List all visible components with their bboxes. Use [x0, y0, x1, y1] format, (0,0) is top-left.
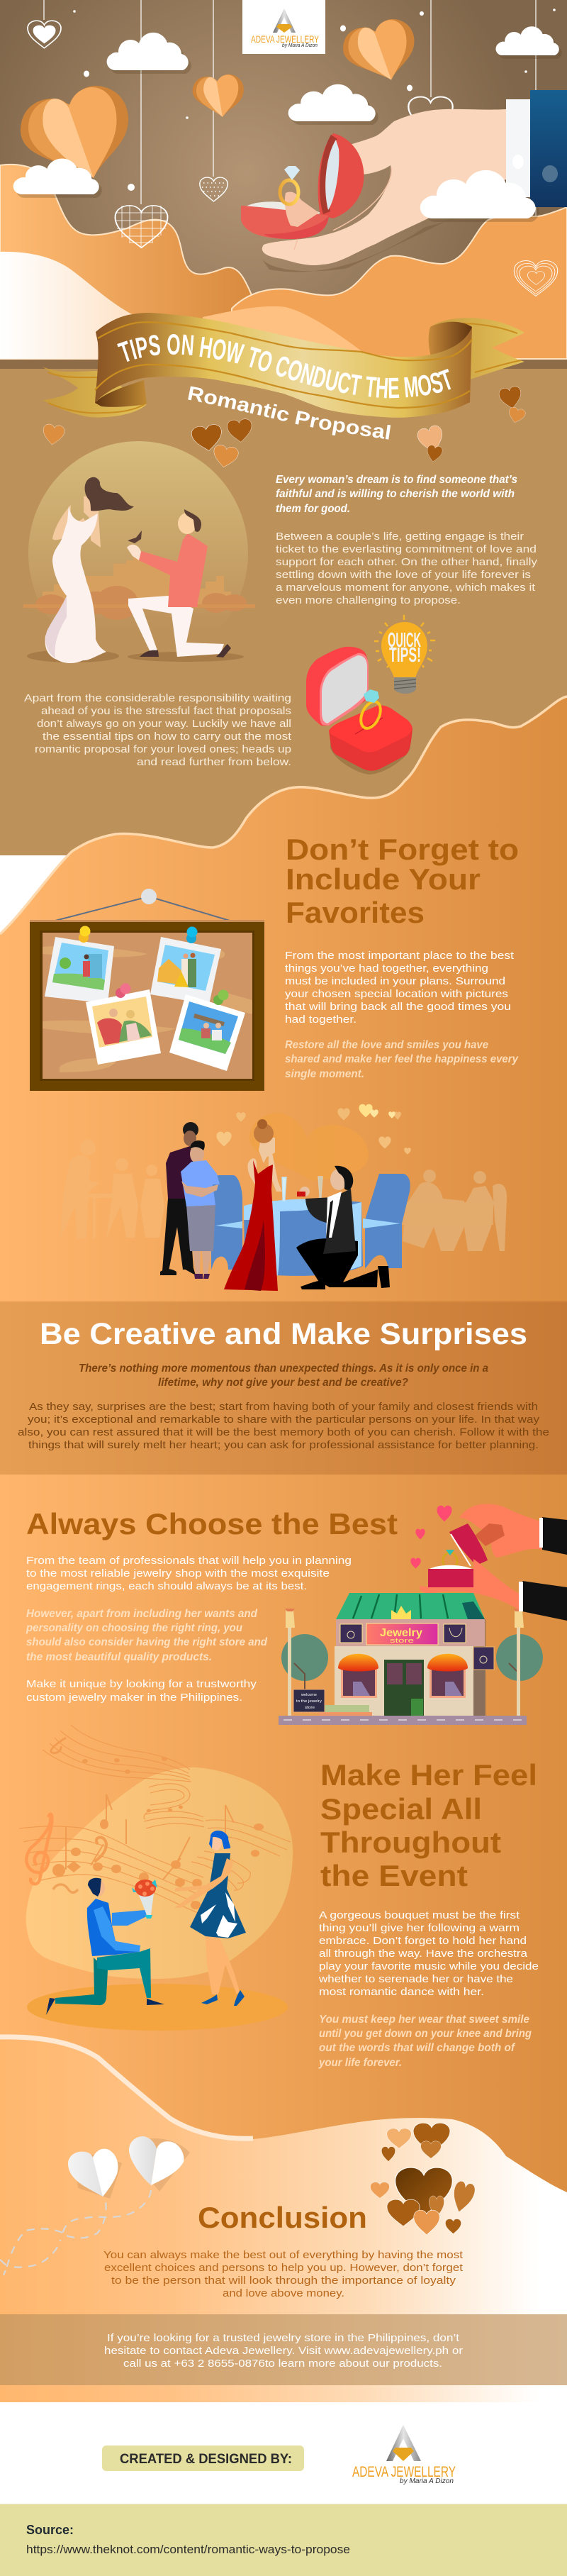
- body: From the most important place to the best: [285, 950, 515, 962]
- sandwich board: [293, 1689, 325, 1712]
- conclusion wave highlight: [0, 2037, 253, 2138]
- jewelry store: [279, 1593, 543, 1725]
- body: [103, 2249, 464, 2299]
- trees: [35, 586, 247, 620]
- woman: [45, 477, 134, 663]
- body: You can always make the best out of everything by having the most: [103, 2249, 464, 2261]
- photo 2: [150, 937, 221, 1004]
- heading: Favorites: [286, 896, 425, 929]
- body: [285, 950, 515, 1026]
- staff right: [191, 1820, 291, 1890]
- notes: [52, 1757, 264, 1909]
- hanger: [55, 896, 230, 921]
- body: most romantic dance with her.: [319, 1986, 484, 1998]
- diamond: [284, 166, 300, 180]
- contact text: [104, 2332, 463, 2370]
- body: From the team of professionals that will help you in planning: [26, 1555, 352, 1567]
- arch: [28, 441, 248, 665]
- body: you; it’s exceptional and remarkable to share with the particular persons on your life. In that way: [28, 1414, 540, 1426]
- body: and love above money.: [223, 2287, 344, 2299]
- gold ring: [357, 699, 384, 731]
- logo top: [242, 0, 325, 54]
- jewelry store: store: [390, 1637, 414, 1644]
- line heart: top left: [28, 21, 61, 48]
- body: must be included in your plans. Surround: [285, 975, 505, 987]
- windows: [341, 1665, 466, 1698]
- lead: [79, 1362, 488, 1389]
- silhouettes left: [60, 1140, 164, 1238]
- glasses: [282, 1177, 286, 1201]
- intro lead: Every woman’s dream is to find someone that’s: [276, 474, 517, 486]
- heading: Special All: [320, 1792, 482, 1826]
- body: also, you can rest assured that it will be the best memory both of you can cherish. Follow it with the: [18, 1426, 549, 1438]
- highlight: your life forever.: [318, 2057, 402, 2069]
- intro paragraph: a marvelous moment for anyone, which makes it: [276, 582, 536, 594]
- steps: [320, 1705, 369, 1712]
- highlight: [285, 1039, 519, 1080]
- contact text: If you’re looking for a trusted jewelry store in the Philippines, don’t: [107, 2332, 460, 2344]
- intro right aligned paragraph: don’t always go on your way. Luckily we have all: [37, 718, 291, 730]
- kneeling man: [46, 1878, 164, 2015]
- couple with bouquet: [46, 1831, 246, 2015]
- staff top: [43, 1725, 191, 1782]
- hands with ring box: [410, 1504, 567, 1621]
- table: [244, 1200, 363, 1276]
- music notes: [19, 1725, 291, 1914]
- cork board: [30, 889, 264, 1091]
- thumbnail: [335, 150, 360, 170]
- line heart: dotted: [200, 177, 228, 201]
- body: As they say, surprises are the best; start from having both of your family and closest friends with: [29, 1401, 538, 1413]
- contact text: call us at +63 2 8655-0876to learn more about our products.: [123, 2358, 442, 2370]
- highlight: out the words that will change both of: [319, 2042, 516, 2054]
- box shadow: [330, 738, 410, 775]
- left orange hill: [0, 165, 262, 359]
- paper heart: big left: [21, 86, 128, 178]
- door: [384, 1660, 424, 1716]
- left tail: [43, 367, 147, 417]
- gem: [364, 689, 379, 703]
- intro right aligned paragraph: and read further from below.: [137, 756, 291, 768]
- body: whether to serenade her or have the: [318, 1973, 513, 1985]
- stars: [10, 9, 556, 198]
- bouquet: [132, 1880, 157, 1919]
- intro paragraph: [276, 531, 538, 606]
- hand: [262, 109, 506, 265]
- main ribbon: [95, 313, 472, 418]
- ring: [280, 180, 298, 204]
- cloud shadows: [16, 30, 562, 222]
- box lid: [318, 133, 364, 218]
- lower sleeve: [522, 1581, 567, 1621]
- intro text: faithful and is willing to cherish the world with: [276, 488, 515, 500]
- photo 4: [169, 994, 245, 1071]
- highlight: Restore all the love and smiles you have: [285, 1039, 488, 1051]
- created by badge: CREATED & DESIGNED BY:: [120, 2452, 292, 2467]
- road: [279, 1716, 527, 1725]
- gold ring: [443, 1553, 457, 1570]
- intro paragraph: ticket to the everlasting commitment of love and: [276, 543, 537, 555]
- section: make her feel special: [318, 1758, 539, 2069]
- roof: [336, 1593, 485, 1619]
- heart left: [68, 2149, 118, 2197]
- jewelry store: Jewelry: [380, 1627, 422, 1639]
- standing woman: [174, 1831, 246, 2006]
- dinner scene: [60, 1104, 507, 1291]
- floor shadows: [27, 650, 244, 662]
- white hill: [0, 252, 142, 359]
- dashed flight path: [0, 2190, 151, 2275]
- hand shadow: [262, 188, 506, 272]
- board: [43, 933, 252, 1079]
- intro right aligned paragraph: Apart from the considerable responsibility waiting: [24, 692, 291, 704]
- kneeling man: [296, 1166, 390, 1289]
- sandwich board: welcome: [301, 1693, 317, 1697]
- small hearts row: [42, 385, 527, 470]
- right fold: [429, 322, 472, 362]
- cuff: [506, 99, 530, 197]
- big faded heart: [249, 1113, 369, 1181]
- source url: https://www.theknot.com/content/romantic-ways-to-propose: [26, 2543, 350, 2556]
- bulb text: QUICK: [388, 629, 421, 652]
- closing: [26, 1678, 257, 1704]
- line heart: outline: [408, 97, 453, 132]
- ground line: [23, 604, 255, 608]
- highlight: the most beautiful quality products.: [26, 1651, 212, 1663]
- photo 3: [86, 989, 161, 1065]
- heading: Be Creative and Make Surprises: [40, 1317, 527, 1351]
- background: sky: [0, 0, 567, 369]
- paper heart: top right: [343, 19, 414, 80]
- highlight: shared and make her feel the happiness every: [285, 1053, 519, 1065]
- logo wordmark: ADEVA JEWELLERY: [251, 33, 319, 45]
- closing: Make it unique by looking for a trustworthy: [26, 1678, 257, 1690]
- body: had together.: [285, 1014, 357, 1026]
- body: all through the way. Have the orchestra: [319, 1948, 528, 1960]
- hugging woman: [181, 1140, 220, 1279]
- source label: Source:: [26, 2523, 74, 2537]
- body: A gorgeous bouquet must be the first: [319, 1909, 520, 1921]
- clouds top: [13, 26, 559, 194]
- conclusion: [103, 2201, 464, 2299]
- awnings: [338, 1654, 468, 1671]
- heading: Throughout: [320, 1826, 501, 1859]
- line heart: rings: [514, 261, 558, 296]
- open ring box: [306, 647, 412, 775]
- banner title: [123, 355, 455, 398]
- banner: [43, 313, 524, 450]
- clefs and rests: [26, 1814, 52, 1884]
- lid: [306, 647, 369, 726]
- sandwich board: store: [305, 1706, 315, 1710]
- heart shadow: [74, 2138, 190, 2199]
- hanging strings: [44, 0, 536, 260]
- intro text: [276, 474, 538, 606]
- section: don't forget: [285, 833, 519, 1080]
- highlight: However, apart from including her wants and: [26, 1608, 258, 1620]
- background: tan ground: [0, 359, 567, 855]
- left chair: [211, 1175, 242, 1270]
- logo top: by Maria A Dizon: [282, 43, 318, 48]
- blob behind couple: [26, 1767, 293, 1979]
- body: that will bring back all the good times you: [285, 1001, 511, 1013]
- section band: be creative: [0, 1301, 567, 1475]
- box base: [245, 201, 320, 227]
- staff middle: [144, 1784, 204, 1828]
- main orange section background: [0, 696, 567, 2199]
- body: things you’ve had together, everything: [285, 962, 488, 975]
- left fold: [95, 380, 147, 407]
- crown: [391, 1606, 411, 1619]
- hugging man: [160, 1122, 198, 1275]
- lid: [449, 1523, 488, 1565]
- heart right: [129, 2136, 157, 2185]
- section: always choose the best: [26, 1507, 398, 1704]
- heart cluster: [371, 2123, 477, 2235]
- man: [127, 509, 231, 657]
- silhouettes right: [401, 1170, 507, 1251]
- highlight: [26, 1608, 268, 1663]
- lamps: [285, 1609, 524, 1716]
- intro right aligned paragraph: romantic proposal for your loved ones; heads up: [35, 743, 291, 755]
- paper hearts: [68, 2136, 190, 2199]
- body: [26, 1555, 352, 1592]
- contact band: [0, 2314, 567, 2385]
- floating hearts: [216, 1104, 411, 1155]
- intro paragraph: settling down with the love of your life forever is: [276, 569, 531, 581]
- body: excellent choices and persons to help you up. However, don’t forget: [104, 2262, 464, 2274]
- heading: Don’t Forget to: [286, 833, 519, 866]
- created by badge: [102, 2445, 304, 2471]
- photo 1: [45, 937, 114, 1004]
- intro paragraph: Between a couple’s life, getting engage is their: [276, 531, 524, 543]
- body: to be the person that will look through the importance of loyalty: [111, 2275, 456, 2287]
- right orange hill: [232, 207, 567, 359]
- body: to the most reliable jewelry shop with the most exquisite: [26, 1567, 330, 1580]
- body: thing you’ll give her following a warm: [319, 1922, 520, 1934]
- highlight: personality on choosing the right ring, you: [26, 1622, 243, 1634]
- body: [318, 1909, 539, 1998]
- quick tips bulb: [374, 615, 435, 694]
- heading: the Event: [320, 1859, 468, 1892]
- proposal hand with ring box: [241, 90, 567, 272]
- trees: [281, 1634, 543, 1699]
- red dress woman: [224, 1119, 282, 1291]
- bulb body: [381, 622, 427, 678]
- body: your chosen special location with pictures: [285, 988, 508, 1000]
- skyline: [43, 553, 231, 606]
- base top: [329, 706, 412, 753]
- ribbon stripes: [95, 322, 472, 408]
- highlight: until you get down on your knee and bring: [319, 2028, 532, 2040]
- banner: TIPS ON HOW TO CONDUCT THE MOST: [117, 334, 451, 399]
- logo mark: [273, 9, 296, 33]
- upper sleeve: [542, 1517, 567, 1555]
- floor ellipse: [27, 1984, 288, 2031]
- bulb base: [394, 677, 416, 694]
- source panel: [0, 2504, 567, 2576]
- intro right aligned paragraph: [24, 692, 292, 768]
- right chair: [365, 1174, 410, 1268]
- stucco wall: [335, 1646, 485, 1716]
- sandwich board: to the jewelry: [296, 1699, 322, 1704]
- line heart: grid: [115, 206, 168, 248]
- staff main: [19, 1826, 203, 1914]
- footer logo: [352, 2425, 456, 2485]
- contact text: hesitate to contact Adeva Jewellery. Visit www.adevajewellery.ph or: [104, 2345, 463, 2357]
- couple illustration: [23, 441, 255, 665]
- finger: [285, 191, 319, 227]
- heading: Always Choose the Best: [26, 1507, 398, 1540]
- light hill: [203, 306, 372, 359]
- footer logo: ADEVA JEWELLERY: [352, 2464, 456, 2480]
- bulb rays: [374, 615, 435, 667]
- highlight: single moment.: [285, 1068, 364, 1080]
- intro paragraph: even more challenging to propose.: [276, 594, 461, 606]
- frame: [30, 921, 264, 1091]
- conclusion background: [0, 2038, 567, 2402]
- highlight: should also consider having the right store and: [26, 1636, 268, 1648]
- body: [18, 1401, 549, 1451]
- subtitle: [186, 399, 391, 440]
- wave highlight: [0, 696, 567, 934]
- lead: lifetime, why not give your best and be creative?: [158, 1377, 409, 1389]
- intro right aligned paragraph: ahead of you is the stressful fact that proposals: [41, 705, 291, 717]
- body: embrace. Don’t forget to hold her hand: [319, 1935, 527, 1947]
- bulb text: TIPS!: [389, 644, 421, 667]
- sleeve: [530, 90, 567, 207]
- body: engagement rings, each should always be at its best.: [26, 1580, 307, 1592]
- lower hand: [420, 1559, 521, 1611]
- base lower: [329, 728, 412, 771]
- intro text: them for good.: [276, 503, 350, 515]
- closing: custom jewelry maker in the Philippines.: [26, 1692, 242, 1704]
- highlight: You must keep her wear that sweet smile: [319, 2014, 529, 2026]
- box base: [430, 1565, 472, 1569]
- paper heart: middle: [189, 68, 246, 120]
- intro paragraph: support for each other. On the other hand, finally: [276, 556, 538, 568]
- cloud over hand: [420, 170, 536, 218]
- hearts: [410, 1506, 452, 1569]
- footer logo: by Maria A Dizon: [400, 2477, 454, 2485]
- lead: There’s nothing more momentous than unexpected things. As it is only once in a: [79, 1362, 488, 1375]
- heading: Make Her Feel: [320, 1758, 537, 1792]
- heading: Conclusion: [198, 2201, 367, 2234]
- upper hand: [459, 1504, 542, 1558]
- body: things that will surely melt her heart; you can ask for professional assistance for better planning.: [28, 1439, 539, 1451]
- pins: [79, 926, 228, 1005]
- right tail: [430, 318, 524, 379]
- body: play your favorite music while you decide: [319, 1960, 539, 1972]
- sign band: [336, 1619, 485, 1646]
- heading: Include Your: [286, 862, 481, 896]
- banner: Romantic Proposal: [188, 386, 391, 440]
- intro right aligned paragraph: the essential tips on how to carry out the most: [43, 731, 292, 743]
- highlight: [318, 2014, 532, 2069]
- credit strip: [0, 2402, 567, 2504]
